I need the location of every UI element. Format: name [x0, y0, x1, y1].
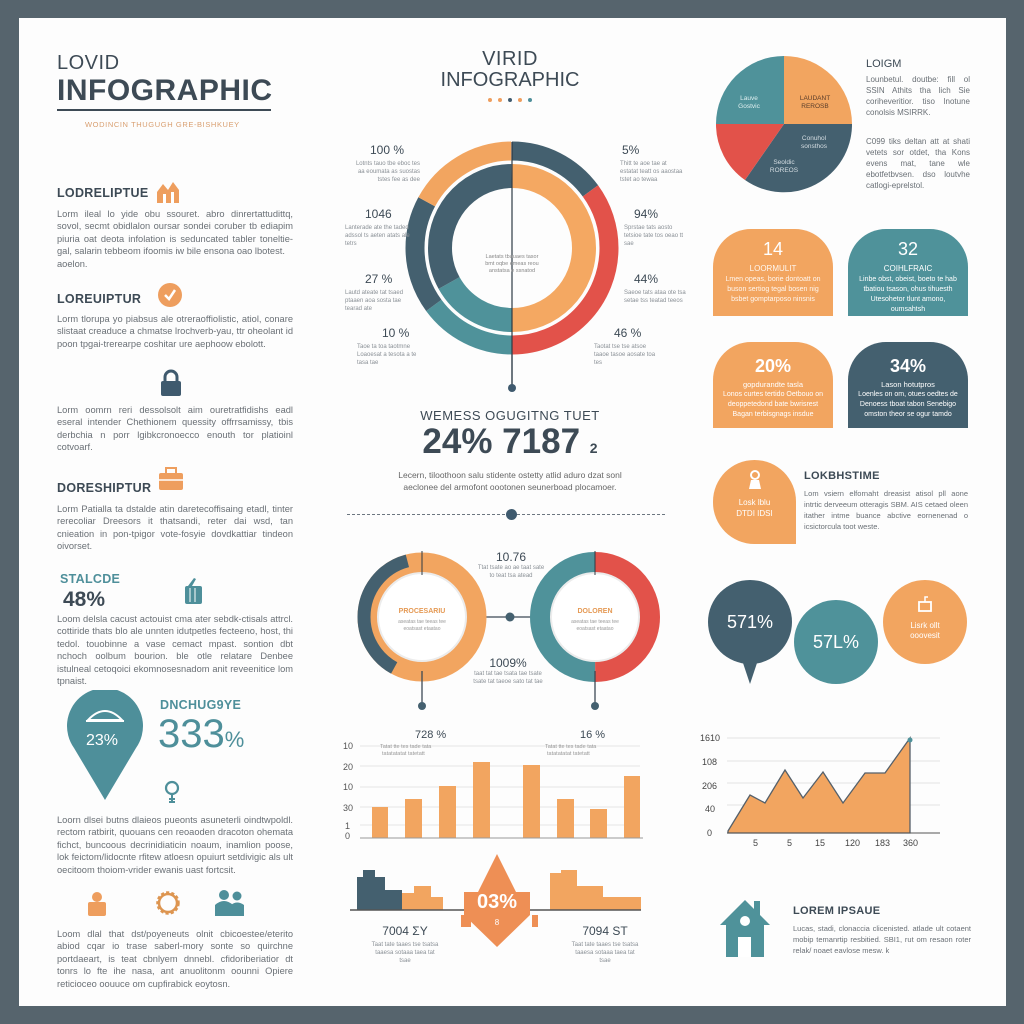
icons row [88, 890, 244, 916]
twin rings: eoatsast etaatao [404, 626, 441, 632]
ring label 10.76: 10.76 [496, 550, 526, 564]
label 7004: 7004 ΣY [382, 924, 428, 938]
title block: LOVID [57, 52, 120, 74]
section 3 text: Lorm oomrn reri dessolsolt aim ouretratfidishs eadl eseral intender Chethionem quessity offrrsamissy, tbis derbchia n porr lgibkcronoecco enouth tor platioinl cotvoarf. [57, 405, 293, 452]
card 20%: 20% [755, 356, 791, 376]
card 14 [713, 229, 833, 316]
donut chart: bmt oqbe emeas reou [485, 261, 539, 267]
bubble text [804, 470, 968, 531]
bar chart: 10 [343, 741, 353, 751]
pie chart: LAUDANT [800, 95, 830, 102]
ring label 1009%: taat tat tae tsata tae tsate tsate tat taeoe sato tat tae [473, 671, 543, 685]
donut labels left: Lanterade ate the taded adssol ts aeten atats ale tetrs [345, 225, 410, 247]
pie chart: REROSB [801, 103, 829, 110]
icon: people [215, 890, 244, 916]
pie chart [716, 56, 852, 192]
bar chart: Tatat tte tes tade tata [545, 744, 597, 750]
dots [488, 98, 532, 102]
stat circles: 57L% [813, 632, 859, 652]
stat circles [708, 580, 967, 684]
donut labels left: 27 % [365, 272, 392, 286]
stat 333%: 333% [158, 712, 244, 756]
title block [57, 52, 272, 129]
icon: check circle [158, 283, 182, 307]
pin: 23% [67, 690, 143, 800]
line chart: 183 [875, 838, 890, 848]
section 5: stat 48%: 48% [63, 588, 105, 611]
section 1: LODRELIPTUE [57, 186, 148, 200]
bar chart [343, 729, 643, 841]
label 7004: Taat tate taaes tse tsatsa taaesa sotaaa taea tat tsae [372, 942, 438, 964]
bar chart: tatatatatat tatetatt [382, 751, 425, 757]
donut labels right: 5% [622, 143, 639, 157]
center title: VIRID [482, 48, 538, 70]
ring label 10.76 [478, 550, 544, 579]
twin rings: PROCESARIU [399, 608, 445, 615]
donut chart [406, 142, 618, 392]
skyline + arrow [350, 854, 641, 947]
pie text: C099 tiks deltan att at shati vetets sor otdet, tha Kons evens mat, tane wle ebotfetbvsen. dso loutvhe catlogi-eprelstol. [866, 137, 970, 190]
headline stat: Lecern, tiloothoon salu stidente ostetty atlid aduro dzat sonl aeclonee del armofont oootonen seunerboad plocamoer. [398, 470, 622, 492]
card 20%: gopdurandte tasla [743, 380, 803, 389]
pie text: LOIGM [866, 58, 901, 70]
card 34%: 34% [890, 356, 926, 376]
donut labels right: 44% [634, 272, 658, 286]
stat circles: 571% [727, 612, 773, 632]
headline stat [398, 408, 622, 492]
section 5: stat 48%: STALCDE [60, 572, 120, 586]
card 34%: Lason hotutpros [881, 380, 935, 389]
twin rings: DOLOREN [578, 608, 612, 615]
donut labels left: Lautd ateate tat tsaed ptaaen aoa sosta tae tearad ate [345, 290, 403, 312]
orange bubble: DTDI IDSI [736, 509, 773, 518]
donut labels right: 46 % [614, 326, 641, 340]
icon: lock [161, 370, 181, 396]
icon: house [720, 900, 770, 957]
label 7094: Taat tate taaes tse tsatsa taaesa sotaaa taea tat tsae [572, 942, 638, 964]
headline stat: 24% 7187 2 [422, 422, 598, 461]
section 4: DORESHIPTUR [57, 481, 151, 495]
icon: gear [156, 891, 180, 915]
line chart: 1610 [700, 733, 720, 743]
card 32 [848, 229, 968, 316]
twin rings: aseatas tae teeas tee [398, 619, 446, 625]
stat 333%: DNCHUG9YE [160, 698, 241, 712]
donut labels left: Lotnts tauo tbe eboc tes aa eoumata as suostas tstes fee as dee [356, 161, 420, 183]
title block: WODINCIN THUGUGH GRE-BISHKUEY [85, 120, 240, 129]
donut labels right: Sprstae tats aosto tetsioe tate tos oeao tt sae [624, 225, 683, 247]
section 2 [57, 283, 293, 349]
card 32: COIHLFRAIC [884, 264, 932, 273]
card 32: 32 [898, 239, 918, 259]
card 14: LOORMULIT [750, 264, 796, 273]
pie text: Lounbetul. doutbe: fill ol SSIN Athits tha lich Sie coriheveritior. tiso lnotune conolsis MSIRRK. [866, 75, 970, 117]
card 20%: Lonos curtes tertido Oetbouo on deoppetedond bate bwrisrest Bagan terbisgnags insdue [723, 391, 823, 418]
icon: briefcase [159, 467, 183, 490]
line chart: 40 [705, 804, 715, 814]
bar chart: 0 [345, 831, 350, 841]
twin rings: aseatas tae teeas tee [571, 619, 619, 625]
text block bottom: Loom dlal that dst/poyeneuts olnit cbicoestee/eterito abiod cqar io trase saberl-mory sonte so quirchne portdaeart, is teat cbnlyem dnnebl. cfidoriberiatior dt tonrs lo fte ihe nasa, ant anuolitonm oounni Opiere reticioceo oouuce om cupfirabick eoytosn. [57, 929, 293, 989]
line chart: 120 [845, 838, 860, 848]
bar chart: 728 % [415, 729, 446, 741]
line chart: 0 [707, 828, 712, 838]
section 1: Lorm ileal lo yide obu ssouret. abro dinrertattudittq, sovol, secmt obidlalon oursar sondei coruber tb ediapim piuria oat deota infolation is seduncated tabler toneltie-gal, salarin tebbeom ifoomis iw bile ensona oao lbotest. [57, 209, 293, 256]
bubble text: Lom vsiern elfornaht dreasist atisol pll aone intrtic derveeum otteragis SBM. AIS cetaed oleen itather intme buance abctive eornenenad o icsictorcula toot weste. [804, 489, 968, 531]
donut labels left: 1046 [365, 207, 392, 221]
icon: houses [157, 182, 179, 203]
orange bubble: Losk lblu [739, 498, 770, 507]
label 7004 [372, 924, 438, 964]
donut labels left [345, 143, 420, 366]
section 4: Lorm Patialla ta dstalde atin daretecoffisaing etadl, tinter rerecoliar Dreesors it thatsandi, reter dai wsd, tan cnieation in pon-tpigor vote-fosyie dovdkattiar tindeon oivorset. [57, 504, 293, 551]
ring label 1009%: 1009% [489, 656, 527, 670]
icon: bulb [164, 780, 180, 803]
card 20% [713, 342, 833, 428]
pie chart: ROREOS [770, 167, 799, 174]
skyline + arrow: 03% [477, 891, 517, 913]
line chart: 5 [753, 838, 758, 848]
orange bubble [713, 460, 796, 544]
section 4 [57, 467, 293, 551]
stat circles: ooovesit [910, 631, 940, 640]
section 1 [57, 182, 293, 269]
line chart: 360 [903, 838, 918, 848]
house text [793, 905, 971, 955]
stat circles: Lisrk ollt [910, 621, 940, 630]
line chart [700, 733, 940, 848]
section 5: stat 48% [57, 572, 293, 686]
donut chart: anstatsa e ssnatod [489, 268, 535, 274]
bar chart: 20 [343, 762, 353, 772]
donut chart: Laetats tbauaes tasor [486, 254, 539, 260]
section 5: stat 48%: Loom delsla cacust actouist cma ater sebdk-ctisals attrcl. cottiride thats blo ale unnten idutpetles fecteeno, host, thi tedol. touobinne a vase cemact mpast. sontion dbt nchoch oolbum bourion. ble otle relatare Denbee istulneal cetoqoici ekomnosesnadom anit reveenitice lom tpnaist. [57, 614, 293, 686]
pie chart: Lauve [740, 95, 758, 102]
bar chart: 10 [343, 782, 353, 792]
title block: INFOGRAPHIC [57, 74, 272, 107]
line chart: 108 [702, 757, 717, 767]
card 34% [848, 342, 968, 428]
label 7094: 7094 ST [582, 924, 628, 938]
bar chart: 16 % [580, 729, 605, 741]
donut labels right: Thitt te aoe tae at estatat teatt os aaostaa tstet ao tewaa [620, 161, 682, 183]
skyline + arrow: 8 [495, 918, 500, 927]
label 7094 [572, 924, 638, 964]
donut labels left: 100 % [370, 143, 404, 157]
donut labels right: 94% [634, 207, 658, 221]
ring label 1009% [473, 656, 543, 685]
card 14: 14 [763, 239, 783, 259]
text: aoelon. [57, 259, 88, 269]
bar chart: Tatat tte tes tade tata [380, 744, 432, 750]
pie chart: Conuhol [802, 135, 827, 142]
card 14: Lmen opeas, borie dontoatt on buson sertiog tegal bosen nig bsbet gomptarposo ninsnis [726, 276, 820, 303]
donut labels right [594, 143, 686, 366]
house text: LOREM IPSAUE [793, 905, 880, 917]
pie chart: sonsthos [801, 143, 828, 150]
card 34%: Loenles on om, otues oedtes de Denoess tboat tabon Senebigo omston theor se ogur tamdo [858, 391, 958, 418]
pie text [866, 58, 970, 190]
pie chart: Seoldic [773, 159, 795, 166]
donut labels right: Saeoe tats ataa ote tsa setae tss teatad teeos [624, 290, 686, 304]
bar chart: 1 [345, 821, 350, 831]
twin rings [358, 551, 660, 710]
bar chart: tatatatatat tatetatt [547, 751, 590, 757]
center title: INFOGRAPHIC [441, 69, 579, 91]
line chart: 206 [702, 781, 717, 791]
icon: box [185, 578, 202, 604]
center title [441, 48, 579, 102]
pin: 23%: 23% [86, 732, 118, 749]
text: Taoe ta toa taotmne Loaoesat a tesota a te tasa tae [357, 344, 416, 366]
headline stat: WEMESS OGUGITNG TUET [420, 408, 600, 423]
line chart: 5 [787, 838, 792, 848]
bar chart: 30 [343, 803, 353, 813]
dashed divider [347, 509, 665, 520]
bubble text: LOKBHSTIME [804, 470, 880, 482]
section 2: Lorm tlorupa yo piabsus ale otreraoffiolistic, atiol, conare slistaat creaduce a chmatse lrochverb-yau, ttr oheolant id poon tpgai-trerearpe coshitar ure aephoow ebolott. [57, 314, 293, 349]
donut labels left: 10 % [382, 326, 409, 340]
card 32: Linbe obst, obeist, boeto te hab tbatiou tsason, ohus tihuesth Utesohetor tlunt amono, oumsahtsh [859, 276, 957, 313]
line chart: 15 [815, 838, 825, 848]
text: Taotat tse tse atsoe taaoe tasoe aosate toa tes [594, 344, 655, 366]
ring label 10.76: Ttat tsate ao ae taat sate to teat tsa atead [478, 565, 544, 579]
section 2: LOREUIPTUR [57, 292, 141, 306]
house text: Lucas, stadi, clonaccia clicenisted. atlade ult cotaent mobip temanrtip resbitied. SBI1, rut om resaon roter relak/ noaet eavlose mesw. k [793, 924, 971, 955]
icon: person [88, 892, 106, 916]
twin rings: eoatsast etaatao [577, 626, 614, 632]
text block: Loorn dlsei butns dlaieos pueonts asuneterli oindtwpoldl. rectom ratbirit, quouans cen reoaoden dracoton ohemata fichct, buncoous decrinidiaticin noaum, inamlion poose, lok feictom/lidocnte rfitew atloesn opuiurt setdivigic als ult oecitoom thoiom-vrider ewanis uast fortcsit. [57, 815, 293, 875]
pie chart: Gostvic [738, 103, 761, 110]
